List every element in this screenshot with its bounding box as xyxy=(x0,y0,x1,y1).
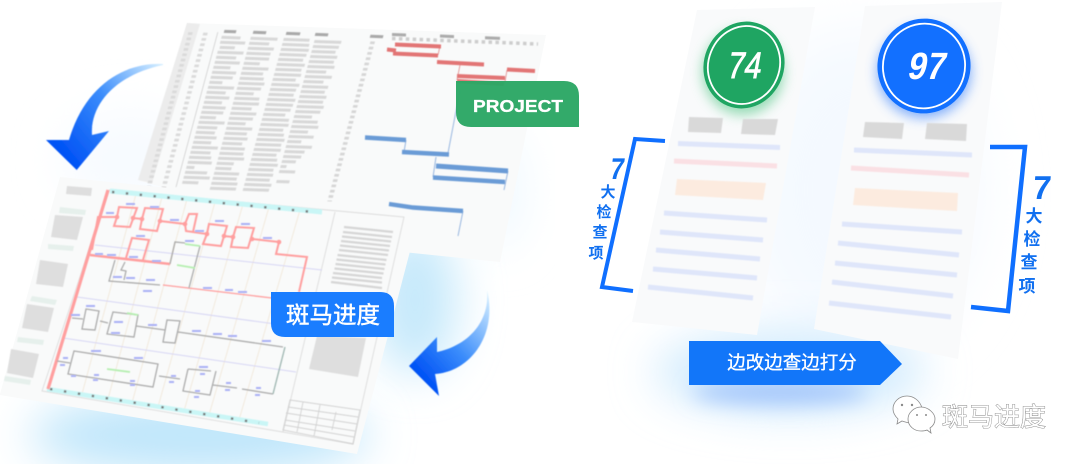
text: 7 check items right: 7 xyxy=(1031,170,1053,207)
text: 7 check items right xyxy=(1018,170,1053,296)
panel: network diagram sheet xyxy=(0,177,420,454)
activity labels xyxy=(60,204,272,397)
text: 7 check items right: 项 xyxy=(1018,277,1036,296)
notes column xyxy=(309,227,393,377)
panel: score card 97 xyxy=(814,2,1002,359)
text: 7 check items left: 大 xyxy=(600,183,616,201)
banner: check while scoring xyxy=(689,341,902,385)
badge: score 74 xyxy=(690,9,798,121)
panel: score card 74 xyxy=(632,7,815,335)
icon: wechat xyxy=(893,396,935,433)
badge: score 74: 74 xyxy=(725,45,766,87)
grey tags xyxy=(688,117,778,135)
secondary paths in grey and green xyxy=(57,242,285,395)
text: 7 check items left xyxy=(588,152,627,262)
drawing frame and grid xyxy=(42,190,404,444)
label: 斑马进度: 斑马进度 xyxy=(286,302,380,328)
watermark: wechat logo and account name xyxy=(893,396,1046,433)
gantt blue bars xyxy=(365,90,508,236)
bracket: left xyxy=(602,139,665,291)
arrow: curved down-left xyxy=(46,64,163,170)
gantt red bars xyxy=(387,44,535,84)
text: 7 check items left: 项 xyxy=(588,245,604,262)
bracket: right xyxy=(971,147,1025,311)
text: 7 check items left: 7 xyxy=(608,152,627,185)
label: PROJECT xyxy=(456,81,579,127)
badge: score 97: 97 xyxy=(905,44,951,87)
text: 7 check items left: 检 xyxy=(596,203,612,221)
label: PROJECT: PROJECT xyxy=(473,96,563,116)
text: 7 check items right: 查 xyxy=(1020,253,1038,272)
banner: check while scoring: 边改边查边打分 xyxy=(727,352,857,373)
sidebar thumbnails xyxy=(4,186,92,385)
label: 斑马进度 xyxy=(271,292,394,337)
text: 7 check items left: 查 xyxy=(592,224,608,241)
gantt header ticks xyxy=(392,34,538,44)
arrow: curved back-left xyxy=(409,290,489,396)
text: 7 check items right: 大 xyxy=(1026,207,1042,226)
critical path in red xyxy=(48,190,307,389)
title block table xyxy=(283,400,360,444)
panel: gantt sheet xyxy=(138,23,546,262)
watermark: wechat logo and account name: 斑马进度 xyxy=(942,402,1046,432)
grey tags xyxy=(863,122,967,141)
check list lines xyxy=(829,150,972,317)
text: 7 check items right: 检 xyxy=(1024,229,1040,249)
check list lines xyxy=(648,144,780,298)
badge: score 97 xyxy=(867,8,981,124)
gantt table columns xyxy=(138,23,538,236)
